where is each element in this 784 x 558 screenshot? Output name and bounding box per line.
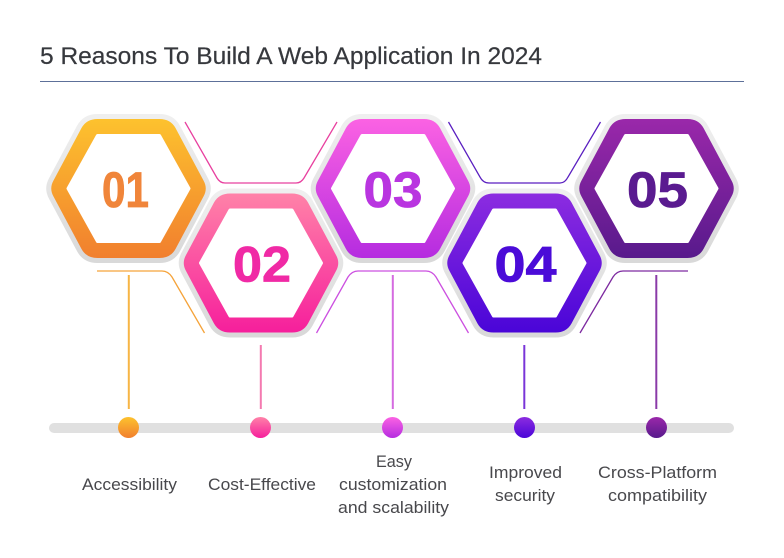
label: Improved security: security [495,486,556,505]
connector lines bottom 3 [316,271,468,333]
label: Accessibility: Accessibility [82,475,177,494]
label: Cross-Platform compatibility: compatibility [608,486,708,505]
hexagon 03 [316,119,470,258]
label: Easy customization and scalability: and scalability [338,498,450,517]
stem 1 [128,275,130,409]
label: Improved security: Improved [489,463,562,482]
stem 4 [523,345,525,409]
hexagon 01: 01 [102,162,149,218]
timeline dot 1 [118,417,139,438]
hexagon 02 [184,194,338,332]
hexagon 05: 05 [627,162,688,218]
label: Improved security [489,463,562,505]
timeline track [49,423,734,433]
timeline dot 5 [646,417,667,438]
stem 5 [655,275,657,409]
title: 5 Reasons To Build A Web Application In 2024 [40,43,542,70]
timeline dot 2 [250,417,271,438]
stem 2 [260,345,262,409]
timeline dot 4 [514,417,535,438]
label: Cross-Platform compatibility [598,463,717,505]
label: Easy customization and scalability [338,452,450,517]
stem 3 [392,275,394,409]
connector lines top 2 [448,122,600,183]
connector lines bottom 1 [97,271,204,333]
hexagon 01 [51,119,206,258]
label: Easy customization and scalability: customization [339,475,447,494]
connector lines bottom 5 [580,271,688,333]
hexagon 05 [579,119,734,258]
hexagon 03: 03 [364,162,422,218]
label: Cost-Effective: Cost-Effective [208,475,316,494]
hexagon 04 [447,194,602,332]
timeline dot 3 [382,417,403,438]
connector lines top 1 [185,122,337,183]
label: Cross-Platform compatibility: Cross-Platform [598,463,717,482]
hexagon 02: 02 [233,236,291,292]
hexagon 04: 04 [494,236,557,292]
label: Easy customization and scalability: Easy [376,452,412,471]
